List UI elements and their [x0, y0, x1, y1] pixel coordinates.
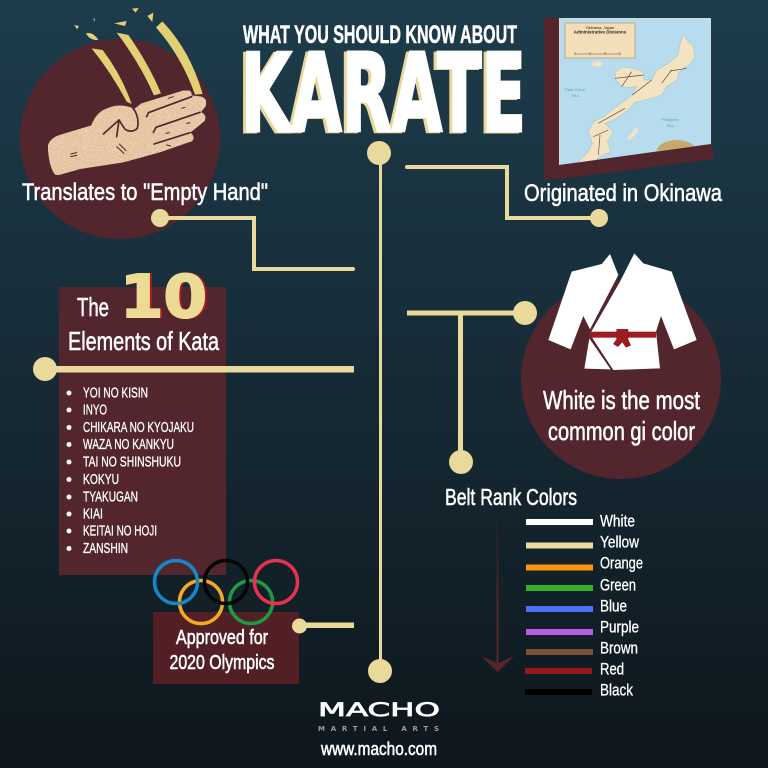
belt black [525, 680, 633, 700]
item 5: TAI NO SHINSHUKU [83, 454, 181, 470]
node: timeline bottom [368, 659, 392, 683]
node: top left [151, 209, 169, 227]
map scale bar [575, 52, 620, 55]
heading: title [238, 21, 526, 158]
item 1: YOI NO KISIN [83, 386, 148, 402]
title line: WHAT YOU SHOULD KNOW ABOUT [243, 21, 517, 49]
belt orange: Orange [600, 554, 643, 572]
panel: empty hand circle [20, 39, 220, 239]
icon: karate chop hand with motion strokes [48, 8, 206, 175]
connector: top left [160, 218, 353, 269]
heading: belt rank colors: Belt Rank Colors [445, 484, 577, 510]
belt red: Red [600, 660, 624, 678]
ring yellow [180, 580, 222, 624]
logo tagline: MARTIAL ARTS [318, 725, 439, 733]
node: timeline top [367, 141, 391, 165]
line 1: Approved for [176, 627, 268, 649]
node: kata [33, 357, 57, 381]
item 2: INYO [83, 402, 107, 418]
map sheet [559, 18, 711, 168]
item 10: ZANSHIN [83, 541, 128, 557]
item 7: TYAKUGAN [83, 490, 138, 506]
motion strokes [74, 8, 203, 104]
node: gi [513, 301, 537, 325]
belt brown [526, 638, 638, 658]
belt purple: Purple [600, 618, 639, 636]
line 2: 2020 Olympics [170, 652, 274, 674]
belt red [525, 660, 624, 678]
panel: olympics [153, 612, 299, 684]
ring blue [154, 560, 198, 604]
map sheet: Administrative Divisions [574, 30, 627, 34]
map label west: East China [565, 87, 586, 92]
panel: elements of kata [59, 287, 226, 575]
panel: gi circle [521, 279, 721, 479]
map legend text: Okinawa, Japan [586, 25, 614, 30]
ring black [204, 560, 248, 604]
number 10: 10 [120, 262, 207, 331]
belt orange [526, 554, 643, 572]
bullets [66, 390, 72, 551]
item 6: KOKYU [83, 472, 119, 488]
ring green [230, 580, 272, 624]
belt blue: Blue [600, 596, 627, 616]
arrow: belt progression [481, 515, 514, 672]
map: Okinawa [544, 18, 714, 180]
connector: gi and belt branch [407, 313, 525, 462]
icon: white gi with red belt [548, 253, 697, 370]
hand [48, 91, 206, 175]
belt green [526, 576, 636, 594]
logo: macho martial arts [318, 699, 440, 733]
map legend box [565, 23, 635, 58]
node: top right [590, 209, 608, 227]
node: belt [449, 450, 473, 474]
heading: the 10 elements of kata [68, 262, 219, 356]
line 1: White is the most [543, 385, 701, 415]
title shadow: KARATE [238, 33, 523, 158]
belt purple [526, 618, 639, 636]
legend: belt colors [525, 512, 643, 700]
number 10 shadow: 10 [122, 262, 209, 331]
belt yellow: Yellow [600, 532, 640, 552]
icon: olympic rings [154, 560, 298, 624]
gi belt knot [613, 329, 631, 347]
elements of kata: Elements of Kata [68, 326, 219, 356]
connector: top right [407, 167, 599, 218]
map sheet: Sea [571, 93, 579, 98]
text: white is the most common gi color [543, 385, 701, 446]
text: translates to empty hand: Translates to "Empty Hand" [22, 179, 268, 206]
item 9: KEITAI NO HOJI [83, 524, 157, 540]
item 4: WAZA NO KANKYU [83, 437, 174, 453]
belt brown: Brown [600, 638, 638, 658]
map water [559, 18, 711, 168]
list: kata elements [66, 386, 194, 557]
text: originated in Okinawa: Originated in Okinawa [524, 180, 722, 207]
connector: kata line [45, 366, 354, 372]
belt blue [526, 596, 627, 616]
map land [575, 34, 697, 165]
hand creases [71, 97, 200, 157]
gi body [548, 254, 618, 349]
line 2: common gi color [548, 416, 695, 446]
belt white [526, 512, 635, 530]
node: olympics [292, 618, 307, 634]
ring red [254, 560, 298, 604]
gi belt [590, 332, 656, 338]
title word: KARATE [241, 32, 526, 157]
map sheet: Sea [666, 123, 674, 128]
item 8: KIAI [83, 506, 103, 522]
belt yellow [526, 532, 640, 552]
word the: The [77, 292, 109, 322]
text: approved for 2020 olympics [170, 627, 274, 674]
belt green: Green [600, 576, 636, 594]
text: website: www.macho.com [320, 739, 437, 759]
map label east: Philippine [661, 117, 679, 122]
maroon map frame [544, 18, 714, 180]
belt white: White [600, 512, 635, 530]
logo wordmark: MACHO [318, 699, 440, 721]
connector: olympics [299, 622, 354, 628]
timeline: central vertical line [379, 153, 382, 671]
item 3: CHIKARA NO KYOJAKU [83, 420, 194, 436]
belt black: Black [600, 680, 633, 700]
